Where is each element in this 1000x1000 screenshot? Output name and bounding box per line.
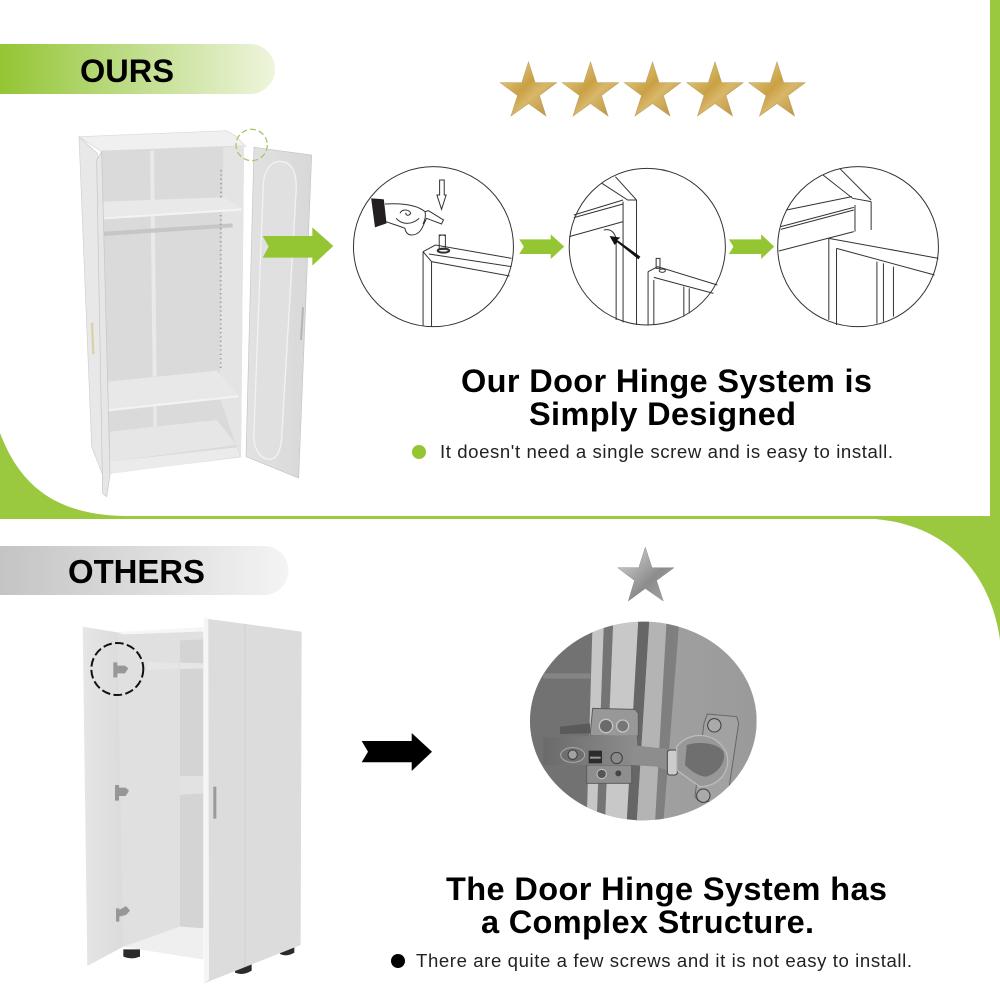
- step 3 circle: [778, 167, 938, 327]
- middle panel: [177, 776, 203, 795]
- banner: ours: OURS: [80, 53, 174, 89]
- closed right door: [204, 618, 302, 983]
- open left door: [83, 627, 123, 966]
- edge of left door: [97, 152, 110, 497]
- large green arrow: [263, 227, 333, 266]
- heading: other hinge system: a Complex Structure.: [481, 904, 814, 940]
- upper shelf: [103, 197, 242, 217]
- hinge arm: [634, 746, 670, 770]
- lower shelf: [108, 371, 238, 409]
- cabinet ceiling: [117, 627, 203, 634]
- banner: ours: [0, 44, 275, 94]
- cup mounting plate: [695, 714, 739, 803]
- bullet: not easy to install: There are quite a few screws and it is not easy to install.: [416, 950, 912, 971]
- heading: other hinge system: The Door Hinge System has: [446, 871, 887, 907]
- hanging rail: [104, 223, 233, 236]
- shelf pin holes: [218, 170, 223, 370]
- dark cabinet interior: [530, 630, 593, 823]
- hinge bottom: [116, 906, 130, 922]
- star rating: one gray star: [618, 547, 674, 601]
- aluminium door frame: [587, 628, 604, 812]
- green step arrow 2: [729, 234, 774, 259]
- step 1 circle: [353, 167, 513, 327]
- open right door: [246, 147, 312, 478]
- dashed callout circle: [91, 643, 143, 695]
- black feet: [123, 947, 294, 974]
- star rating: five gold stars: [500, 62, 805, 116]
- cabinet floor: [110, 420, 237, 462]
- banner: others: [0, 546, 288, 595]
- green step arrow 1: [519, 234, 564, 259]
- cabinet floor: [123, 927, 203, 959]
- black arrow: [362, 733, 432, 771]
- banner: others: OTHERS: [68, 553, 205, 590]
- step diagrams: door hinge installation: [353, 167, 938, 327]
- bullet: easy to install: It doesn't need a single screw and is easy to install.: [440, 441, 893, 462]
- gold left handle: [92, 323, 93, 354]
- cabinet interior: [102, 145, 244, 473]
- door oval panel: [254, 161, 296, 459]
- cabinet top face: [79, 131, 246, 152]
- door handle: [301, 307, 303, 340]
- cabinet left side: [79, 137, 103, 475]
- illustration: other cabinet: [83, 618, 302, 983]
- cabinet interior back: [117, 627, 203, 959]
- heading: our hinge system: Simply Designed: [529, 396, 796, 432]
- heading: our hinge system: Our Door Hinge System is: [461, 363, 872, 399]
- heading: our hinge system: [461, 363, 872, 432]
- hinge mount plates: [590, 708, 638, 736]
- dashed green callout circle: [236, 129, 267, 161]
- hanging rail: [147, 662, 203, 670]
- step 2 circle: [569, 168, 725, 325]
- hinge middle: [115, 785, 129, 801]
- illustration: our open cabinet: [79, 129, 333, 497]
- hinge screws and slots: [599, 719, 613, 733]
- hinge top: [113, 662, 128, 677]
- door handle: [213, 787, 216, 819]
- photo: traditional metal hinge: [530, 620, 757, 823]
- heading: other hinge system: [446, 871, 887, 940]
